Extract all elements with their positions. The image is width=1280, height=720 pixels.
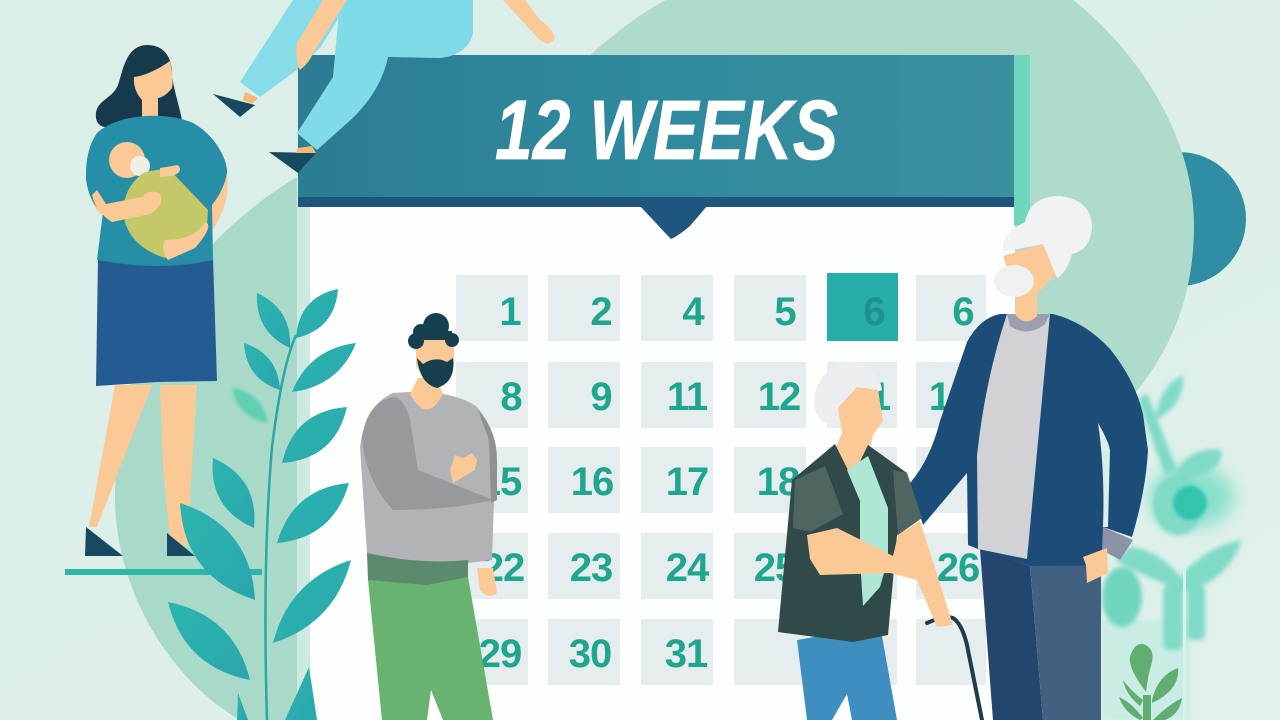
beard [417, 358, 453, 388]
header right strip [1014, 55, 1030, 225]
date numbers: 6 [952, 290, 974, 334]
trousers dark leg [980, 549, 1043, 720]
shirt [847, 456, 888, 606]
hair [408, 313, 459, 349]
date numbers: 8 [500, 375, 522, 419]
date numbers: 13 [929, 375, 971, 419]
beard [994, 265, 1034, 297]
date numbers: 26 [937, 546, 979, 590]
old woman with cane [778, 362, 982, 720]
plant leaves [168, 289, 356, 720]
face and neck [134, 61, 173, 120]
baby bib [130, 156, 150, 176]
hand [1083, 548, 1108, 583]
bearded man [360, 313, 497, 720]
date numbers: 23 [570, 546, 612, 590]
shirt [86, 116, 227, 266]
face [416, 336, 454, 374]
trousers and seat [297, 0, 473, 150]
blurred leaf [232, 388, 268, 423]
hair [96, 45, 182, 127]
trousers light leg [1030, 565, 1101, 720]
neck [410, 378, 443, 410]
arms [88, 175, 228, 260]
hair [814, 362, 882, 425]
collar [1007, 314, 1050, 332]
calendar [298, 55, 1030, 720]
calendar side strip [297, 207, 310, 720]
date numbers: 11 [850, 375, 891, 419]
blurred leaves [1102, 375, 1242, 650]
arms [807, 521, 953, 627]
trousers [368, 577, 493, 720]
date numbers: 12 [758, 375, 800, 419]
large green backdrop circle [590, 0, 1194, 520]
far hand [503, 0, 555, 43]
header shadow band [298, 197, 1014, 207]
right plant [1102, 375, 1242, 720]
left plant [168, 289, 356, 720]
baby head [109, 142, 145, 178]
cuff [1102, 527, 1133, 560]
small green plant [1119, 644, 1182, 720]
arm [296, 0, 347, 70]
date numbers: 24 [666, 546, 710, 590]
hair [1003, 196, 1092, 278]
face [1003, 244, 1057, 294]
shoes [213, 94, 316, 173]
date numbers: 29 [479, 632, 521, 676]
plant stem [1183, 545, 1186, 720]
vest [778, 444, 920, 642]
blurred glow [1150, 467, 1234, 527]
ankles [243, 92, 316, 153]
date numbers: 2 [590, 290, 612, 334]
left sleeve [793, 466, 843, 532]
teal circle [1112, 152, 1246, 286]
trousers back leg [240, 0, 350, 97]
legs [89, 385, 197, 547]
crossed arm [362, 397, 493, 510]
shirt [977, 314, 1050, 559]
gap between arm and body [1098, 423, 1110, 527]
hand at side [477, 568, 497, 596]
date numbers: 16 [571, 460, 613, 504]
skirt [96, 258, 217, 386]
date numbers: 6 [863, 290, 885, 334]
flower centre [1173, 486, 1207, 520]
mother's hands [92, 190, 208, 260]
neck [1015, 289, 1037, 322]
date numbers [479, 290, 979, 676]
date numbers: 5 [774, 290, 796, 334]
date numbers: 9 [590, 375, 612, 419]
pale glow under plant [1102, 620, 1190, 720]
jeans [797, 625, 897, 720]
cardigan [910, 314, 1148, 566]
far sleeve [478, 410, 497, 503]
baby arm [160, 165, 180, 177]
date numbers: 1 [499, 290, 521, 334]
baby blanket [123, 168, 208, 258]
cane [927, 617, 982, 720]
date numbers: 18 [757, 460, 800, 504]
hand on chest [450, 453, 477, 483]
sitting person [213, 0, 555, 173]
ground line [65, 569, 262, 575]
shoes [85, 527, 195, 556]
date cells [456, 275, 986, 685]
date numbers: 25 [754, 546, 797, 590]
header pointer [640, 206, 707, 239]
calendar page [310, 205, 1015, 720]
heading: 12 WEEKS [495, 83, 838, 177]
sweater [360, 392, 495, 563]
lower left green backdrop [115, 177, 297, 720]
old man [910, 196, 1148, 720]
date numbers: 31 [665, 632, 708, 676]
date numbers: 22 [482, 546, 524, 590]
right sleeve [893, 470, 922, 535]
plant stem [265, 335, 296, 720]
waistband [367, 553, 468, 585]
date numbers: 15 [479, 460, 522, 504]
face and neck [835, 387, 883, 480]
mother holding baby [85, 45, 228, 556]
date numbers: 4 [682, 290, 705, 334]
date numbers: 30 [569, 632, 611, 676]
calendar header [298, 55, 1014, 198]
date numbers: 17 [666, 460, 708, 504]
date numbers: 11 [667, 375, 708, 419]
highlighted date [827, 273, 898, 341]
